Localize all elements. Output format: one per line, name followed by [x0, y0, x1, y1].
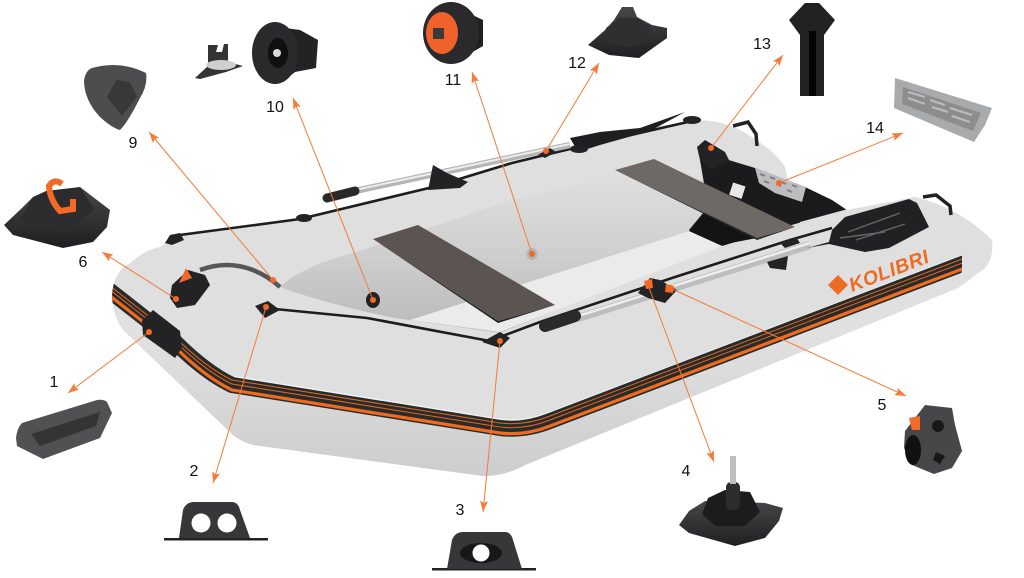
part numbers [50, 36, 887, 519]
part numbers: 4 [682, 463, 691, 480]
front seat [373, 225, 555, 323]
part 14: transom plate [894, 78, 992, 142]
part 1: carry handle [16, 400, 112, 459]
part 12: rope mount pad [588, 7, 667, 58]
part 11: orange valve [423, 2, 483, 64]
hull [112, 120, 992, 476]
stern dark wedge [689, 213, 757, 245]
part numbers: 11 [445, 72, 461, 89]
fittings on boat [142, 116, 800, 358]
part 9: triangular pad [84, 65, 146, 130]
rear seat [615, 159, 795, 240]
ropes [180, 121, 832, 342]
handle strap [200, 265, 280, 287]
part numbers: 3 [456, 502, 465, 519]
floor [410, 231, 722, 332]
part 13: seat bracket [789, 3, 835, 96]
transom [689, 158, 847, 246]
part numbers: 13 [753, 36, 771, 53]
small valve on tube [526, 248, 538, 260]
part 3: rope mount [432, 532, 536, 570]
skirt below stripes [113, 268, 985, 476]
far tube inner surface [280, 158, 740, 333]
part 10: valve and cap [195, 22, 318, 84]
part numbers: 6 [79, 254, 88, 271]
orange hook on bow [179, 268, 192, 283]
near tube top edge [495, 197, 920, 400]
far oar [327, 112, 685, 198]
near oar [545, 199, 929, 326]
part numbers: 10 [266, 99, 284, 116]
inflatable boat [100, 112, 992, 476]
part numbers: 12 [568, 55, 586, 72]
part numbers: 5 [878, 397, 887, 414]
part numbers: 14 [866, 120, 884, 137]
logo: KOLIBRI [846, 246, 933, 297]
part numbers: 9 [129, 135, 138, 152]
part 6: oar holder with orange clip [4, 181, 110, 248]
part 5: oar clamp [904, 405, 962, 474]
orange oarlock tabs [644, 279, 674, 293]
leader arrows [68, 55, 906, 512]
stripes [100, 252, 970, 434]
part numbers: 2 [190, 463, 199, 480]
carry handles [733, 122, 951, 215]
part numbers: 1 [50, 374, 59, 391]
white label on transom [729, 182, 746, 199]
transom plate [755, 168, 806, 202]
light strip on transom [798, 209, 848, 240]
part 4: oarlock mount [679, 456, 783, 546]
part 2: double-hole rope mount [164, 502, 268, 540]
